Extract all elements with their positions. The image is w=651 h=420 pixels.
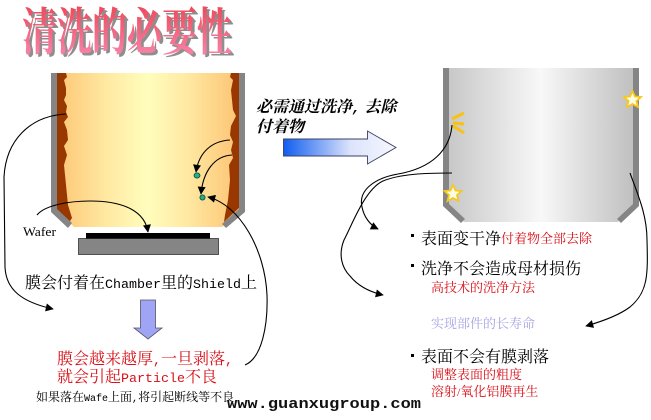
chamber interior xyxy=(57,73,239,227)
arrow: blue gradient xyxy=(284,131,396,164)
particle 2 arrow xyxy=(201,155,232,194)
text: black note: 如果落在Wafe上面,将引起断线等不良 xyxy=(36,389,234,405)
bullet 3: 调整表面的粗度 xyxy=(431,367,522,382)
star top right xyxy=(624,91,641,107)
text: must clean xyxy=(256,98,399,136)
arrow: shield film to note xyxy=(4,114,66,309)
arrow: wafer label to wafer xyxy=(37,201,148,232)
particle dot 2 xyxy=(200,195,205,200)
wafer label: Wafer xyxy=(23,224,57,239)
orange spark marks xyxy=(452,113,464,133)
particle 3 arrow xyxy=(208,197,267,365)
left wall xyxy=(443,68,465,223)
bullet 2: 高技术的洗净方法 xyxy=(431,280,536,295)
bullet 1 xyxy=(411,229,593,248)
film on right shield xyxy=(224,73,239,222)
text: must clean: 必需通过洗净, 去除 xyxy=(256,98,399,117)
film on left shield xyxy=(57,73,72,224)
text: red warning xyxy=(57,349,233,387)
arrow: star to bullet 2 xyxy=(341,173,452,295)
right shield wall xyxy=(222,73,245,228)
bullet 3: 溶射/氧化铝膜再生 xyxy=(431,384,538,399)
clean interior xyxy=(449,68,633,206)
bullet 2 xyxy=(411,260,581,295)
panel: chamber with film xyxy=(51,73,245,228)
bullet 1: 表面变干净 xyxy=(421,229,501,248)
arrow: purple down xyxy=(134,300,162,339)
wafer stage xyxy=(78,233,218,254)
star lower left xyxy=(444,185,462,201)
left shield wall xyxy=(51,73,72,228)
bullet 3 xyxy=(411,347,549,399)
arrow: spark to bullet 1 xyxy=(361,125,452,229)
text: film adheres to shield: 膜会付着在Chamber里的Shield上 xyxy=(25,274,257,293)
title: 清洗的必要性 xyxy=(22,4,232,61)
text: long life: 实现部件的长寿命 xyxy=(431,316,535,331)
right wall xyxy=(617,68,639,223)
text: red warning: 膜会越来越厚,一旦剥落, xyxy=(57,349,233,369)
bullet 3: 表面不会有膜剥落 xyxy=(421,347,549,366)
particle dot 1 xyxy=(194,173,200,178)
clean lower band xyxy=(449,206,633,222)
bullet 1: 付着物全部去除 xyxy=(501,231,593,246)
text: red warning: 就会引起Particle不良 xyxy=(57,368,217,387)
title: 清洗的必要性 xyxy=(24,7,235,64)
panel: cleaned chamber xyxy=(443,68,639,223)
text: must clean: 付着物 xyxy=(256,118,307,136)
bullet 2: 洗净不会造成母材损伤 xyxy=(421,260,581,278)
particle 1 arrow xyxy=(196,140,230,172)
watermark: www.guanxugroup.com xyxy=(227,396,421,413)
arrow: right wall to bullet 3 xyxy=(586,173,647,326)
